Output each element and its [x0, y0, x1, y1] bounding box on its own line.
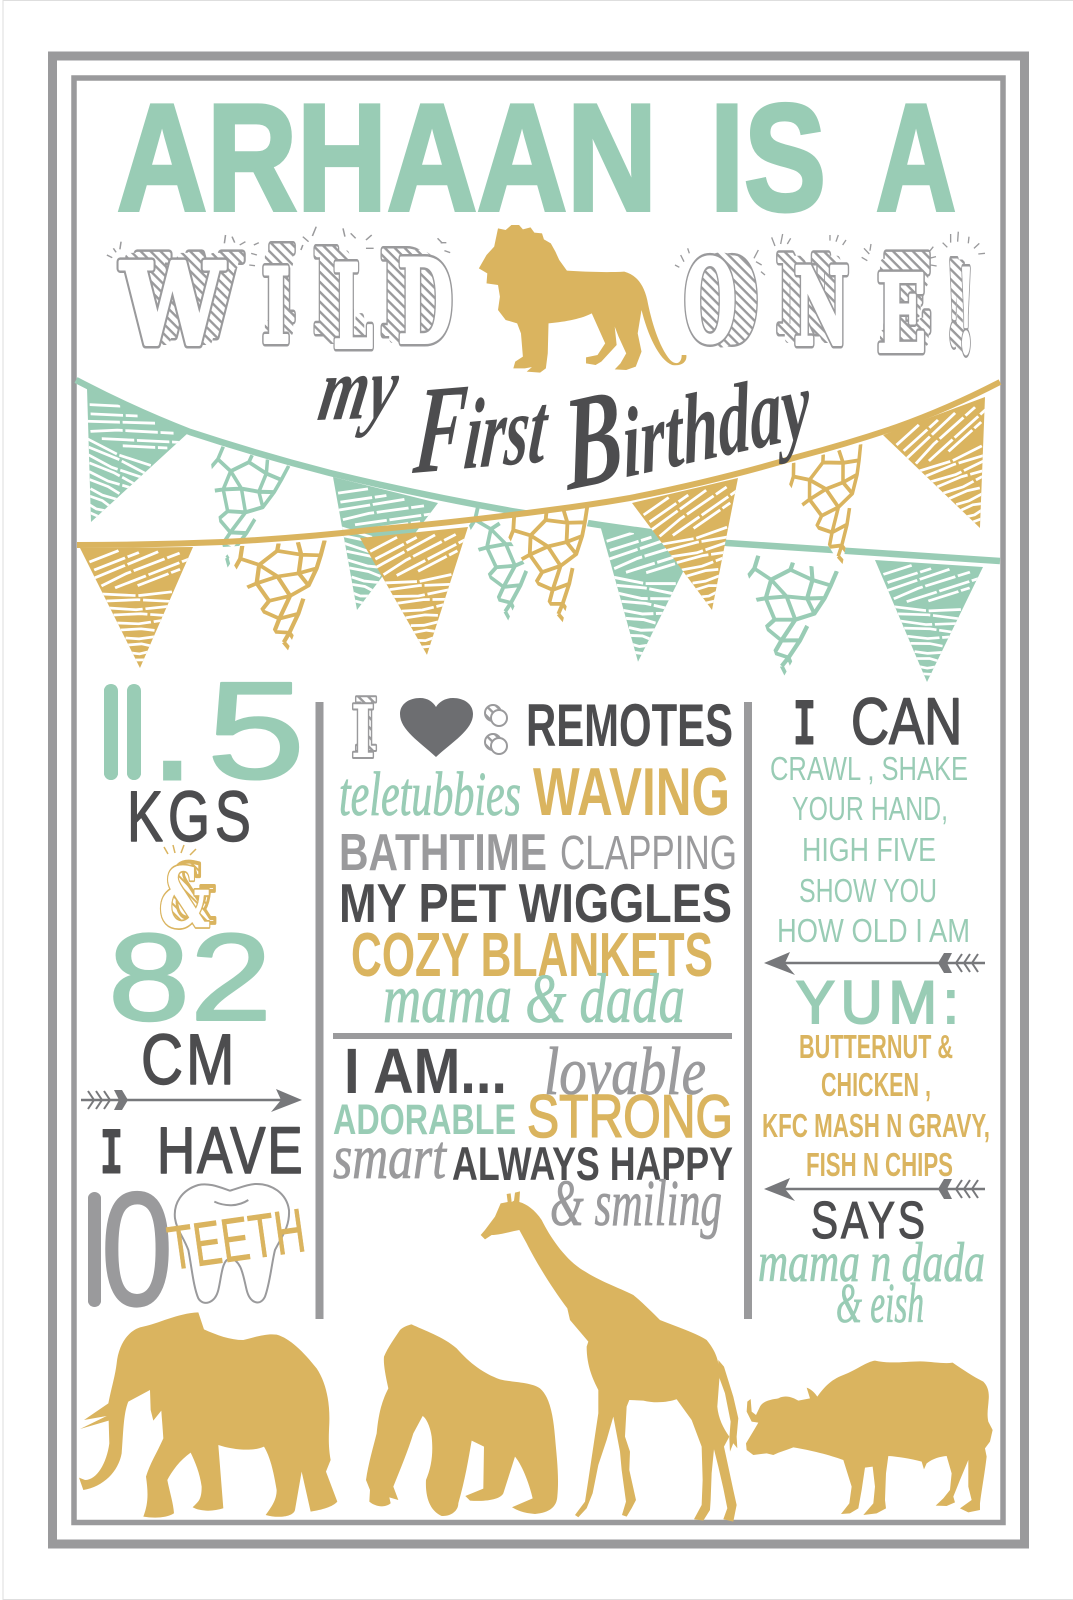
letter N: N: [776, 232, 831, 357]
label: TEETH: TEETH: [163, 1196, 310, 1284]
letter W: W: [120, 240, 226, 371]
title: IS: [710, 73, 826, 243]
heading: ONE!: [675, 231, 985, 379]
icon: buffalo silhouette: [746, 1361, 993, 1515]
letter I: I: [268, 225, 296, 345]
list: I can items: SHOW YOU: [799, 872, 937, 909]
heading: ONE!: !: [958, 245, 974, 379]
heading: I CAN: [793, 684, 962, 764]
flag: gold giraffe 3: [778, 443, 886, 579]
letter E: [877, 231, 932, 376]
stat: 11.5: 5: [207, 654, 305, 808]
label: I HAVE: [100, 1113, 303, 1193]
letter I: [262, 225, 296, 367]
letter D: D: [398, 235, 453, 369]
flag: mint giraffe 3: [740, 554, 837, 685]
text: teletubbies: teletubbies: [339, 761, 521, 829]
heading: ONE!: !: [958, 245, 974, 379]
list: foods: BUTTERNUT &: [799, 1028, 953, 1065]
gold string: [77, 382, 1000, 545]
letter D: D: [380, 227, 435, 361]
bunting: mint flags and string: [40, 380, 1000, 686]
text: MY PET WIGGLES: MY PET WIGGLES: [339, 872, 732, 934]
flag: mint zebra 4: [873, 560, 983, 686]
icon: elephant silhouette: [79, 1312, 337, 1518]
list: I can items: YOUR HAND,: [792, 790, 948, 827]
letter N: N: [785, 238, 840, 363]
stat: 11.5: 1: [93, 656, 170, 810]
letter E: E: [877, 251, 926, 376]
heading: I CAN: I: [793, 689, 816, 764]
label: I HAVE: I: [100, 1118, 123, 1193]
letter L: L: [323, 232, 363, 366]
text: ADORABLE: ADORABLE: [333, 1096, 516, 1144]
flag: mint giraffe 2: [468, 506, 550, 626]
icon: colon: [485, 705, 507, 754]
letter D: D: [380, 227, 435, 361]
letter L: L: [313, 225, 353, 359]
heading: YUM: YUM:: [796, 968, 959, 1036]
heading: WILD: [107, 225, 453, 374]
flag: gold giraffe 2: [497, 506, 610, 632]
letter O: O: [706, 237, 758, 368]
sparkle ticks: [675, 232, 985, 275]
arrow right: [81, 1089, 302, 1112]
inner frame: [74, 78, 1003, 1522]
text: BATHTIME: BATHTIME: [339, 824, 547, 882]
icon: heart: [400, 698, 473, 757]
letter W: W: [120, 240, 226, 371]
letter N: N: [794, 244, 849, 369]
stat: 11.5: [104, 682, 300, 780]
text: STRONG: STRONG: [527, 1083, 733, 1150]
heading: I CAN: CAN: [851, 684, 962, 758]
subtitle: my First Birthday: my: [312, 337, 407, 440]
exclamation mark: [946, 237, 974, 379]
list: I can items: CRAWL , SHAKE: [770, 750, 968, 787]
icon: ampersand: &: [159, 851, 210, 947]
letter N: N: [776, 232, 831, 357]
letter E: E: [877, 251, 926, 376]
stat: 11.5: .: [153, 654, 191, 808]
icon: lion silhouette: [479, 225, 686, 373]
text: COZY BLANKETS: COZY BLANKETS: [351, 921, 713, 990]
letter I: I: [268, 225, 296, 345]
list: foods: FISH N CHIPS: [806, 1146, 953, 1183]
exclamation mark: !: [946, 237, 962, 371]
panel: right column: [758, 684, 990, 1335]
heading: WILD: L: [333, 240, 373, 374]
title: A: [876, 73, 956, 243]
label: CM: CM: [141, 1019, 234, 1099]
icon: ampersand: &: [165, 847, 216, 943]
icon: ampersand: &: [159, 851, 210, 947]
letter O: O: [706, 237, 758, 368]
divider: [333, 1033, 732, 1039]
stat: 10: [88, 1190, 169, 1308]
flag: mint zebra 1: [40, 388, 188, 544]
column divider left: [316, 702, 324, 1319]
letter E: E: [883, 231, 932, 356]
flag: mint zebra 3: [588, 525, 700, 668]
flag: gold zebra 4: [883, 397, 1031, 547]
list: foods: CHICKEN ,: [821, 1066, 931, 1103]
list: I can items: HOW OLD I AM: [777, 912, 970, 949]
text: lovable: lovable: [544, 1033, 706, 1109]
text: CLAPPING: CLAPPING: [560, 827, 737, 880]
flag: gold zebra 2: [360, 527, 481, 660]
text: ALWAYS HAPPY: ALWAYS HAPPY: [452, 1137, 733, 1190]
sparkle ticks: [107, 227, 450, 266]
icon: gorilla silhouette: [366, 1324, 558, 1516]
flag: mint giraffe 1: [191, 444, 289, 579]
text: and eish: & eish: [836, 1273, 924, 1335]
heading: ONE!: !: [952, 241, 968, 375]
stat: 10: 0: [101, 1159, 173, 1340]
icon: tooth: [175, 1184, 289, 1303]
icon: giraffe silhouette: [481, 1191, 738, 1522]
panel: left column stats: [81, 682, 304, 1308]
icon: 3D letter I: I: [351, 689, 375, 774]
panel: center column I love: [333, 682, 737, 1240]
arrow left: [764, 952, 985, 975]
stat: 82: 82: [108, 909, 272, 1047]
letter L: [313, 225, 373, 374]
subtitle: my First Birthday: Birthday: [557, 318, 815, 519]
list: I can items: HIGH FIVE: [802, 831, 936, 868]
title: ARHAAN: [117, 73, 657, 243]
letter E: E: [883, 231, 932, 356]
letter O: O: [684, 237, 736, 368]
letter N: N: [794, 244, 849, 369]
text: WAVING: WAVING: [533, 754, 730, 830]
heading: SAYS: SAYS: [811, 1191, 925, 1249]
subtitle: my First Birthday: First: [409, 351, 555, 501]
letter W: W: [137, 232, 243, 363]
letter D: D: [398, 235, 453, 369]
mint string: [76, 380, 1000, 561]
letter D: D: [389, 231, 444, 365]
letter I: I: [265, 236, 293, 356]
letter I: I: [262, 247, 290, 367]
list: I can items: [770, 750, 970, 949]
text: mama n dada: mama n dada: [758, 1232, 985, 1294]
bunting: gold flags and string: [77, 382, 1031, 668]
flag: mint zebra 2: [304, 477, 438, 623]
text: REMOTES: REMOTES: [526, 692, 733, 759]
letter I: I: [262, 247, 290, 367]
stat: 11.5: 1: [70, 656, 147, 810]
letter E: E: [880, 241, 929, 366]
text: mama and dada: mama & dada: [383, 961, 685, 1038]
list: foods: [762, 1028, 990, 1183]
letter O: O: [684, 237, 736, 368]
flag: gold giraffe 1: [223, 540, 340, 656]
label: I HAVE: HAVE: [157, 1113, 303, 1187]
column divider right: [744, 702, 752, 1319]
letter O: O: [695, 237, 747, 368]
text: I AM: I AM...: [344, 1035, 507, 1107]
icon: 3D letter I: I: [354, 682, 378, 767]
letter W: W: [129, 236, 235, 367]
stat: 10: 1: [46, 1160, 136, 1341]
flag: gold zebra 1: [80, 547, 196, 668]
icon: 3D letter I: I: [354, 682, 378, 767]
text: smart: smart: [333, 1124, 447, 1192]
letter L: L: [313, 225, 353, 359]
arrow left: [764, 1178, 985, 1201]
text: and smiling: & smiling: [550, 1167, 722, 1240]
flag: gold zebra 3: [632, 478, 765, 623]
heading: WILD: L: [333, 240, 373, 374]
exclamation mark: !: [946, 237, 962, 371]
subtitle: my First Birthday: [312, 318, 815, 519]
icon: 3D letter I: I: [351, 689, 375, 774]
label: KGS: KGS: [127, 778, 251, 857]
letter W: W: [137, 232, 243, 363]
